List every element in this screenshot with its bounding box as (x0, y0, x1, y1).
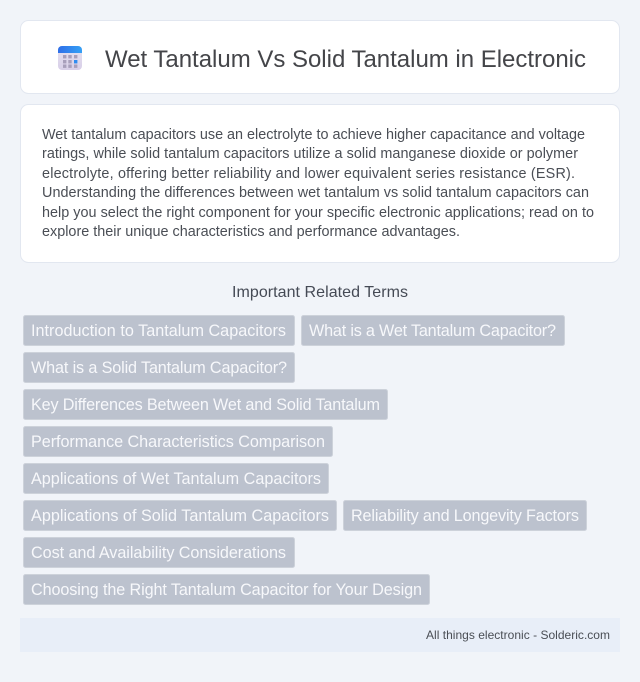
tag: wet applications (24, 464, 328, 494)
tag: reliability: Reliability and Longevity Factors (351, 507, 579, 525)
tag: wet applications: Applications of Wet Tantalum Capacitors (31, 470, 321, 488)
tag: wet capacitor (302, 316, 564, 346)
tag: reliability (344, 500, 586, 530)
tag: performance: Performance Characteristics Comparison (31, 433, 325, 451)
summary text: help you select the right component for your specific electronic applications; read on to (42, 205, 594, 221)
tag: performance (24, 426, 332, 456)
panel: related terms tags (24, 316, 586, 604)
tag: key differences (24, 390, 388, 420)
summary text: ratings, while solid tantalum capacitors utilize a solid manganese dioxide or polymer (42, 146, 578, 162)
summary text (42, 127, 594, 240)
tag: solid capacitor: What is a Solid Tantalum Capacitor? (31, 359, 287, 377)
tag: cost (24, 538, 294, 568)
panel: summary (20, 104, 620, 262)
summary text: Understanding the differences between wet tantalum vs solid tantalum capacitors can (42, 185, 589, 201)
summary text: explore their unique characteristics and performance advantages. (42, 224, 460, 240)
tag: solid applications (24, 500, 336, 530)
tag: solid applications: Applications of Solid Tantalum Capacitors (31, 507, 329, 525)
tag: choosing: Choosing the Right Tantalum Capacitor for Your Design (31, 581, 422, 599)
tag: key differences: Key Differences Between Wet and Solid Tantalum (31, 396, 380, 414)
tag: introduction: Introduction to Tantalum Capacitors (31, 322, 286, 340)
tag: introduction (24, 316, 294, 346)
summary text: Wet tantalum capacitors use an electrolyte to achieve higher capacitance and voltage (42, 127, 585, 143)
tag: wet capacitor: What is a Wet Tantalum Capacitor? (309, 322, 556, 340)
tag: choosing (24, 574, 430, 604)
footer: All things electronic - Solderic.com (426, 628, 610, 642)
tag: cost: Cost and Availability Considerations (31, 544, 286, 562)
heading: related terms: Important Related Terms (232, 284, 408, 301)
title: Wet Tantalum Vs Solid Tantalum in Electronic (105, 46, 586, 73)
summary text: electrolyte, offering better reliability and lower equivalent series resistance (ESR). (42, 166, 575, 182)
footer (20, 618, 620, 652)
icon: calendar (58, 46, 82, 70)
tag: solid capacitor (24, 352, 294, 382)
panel: header (20, 20, 620, 94)
